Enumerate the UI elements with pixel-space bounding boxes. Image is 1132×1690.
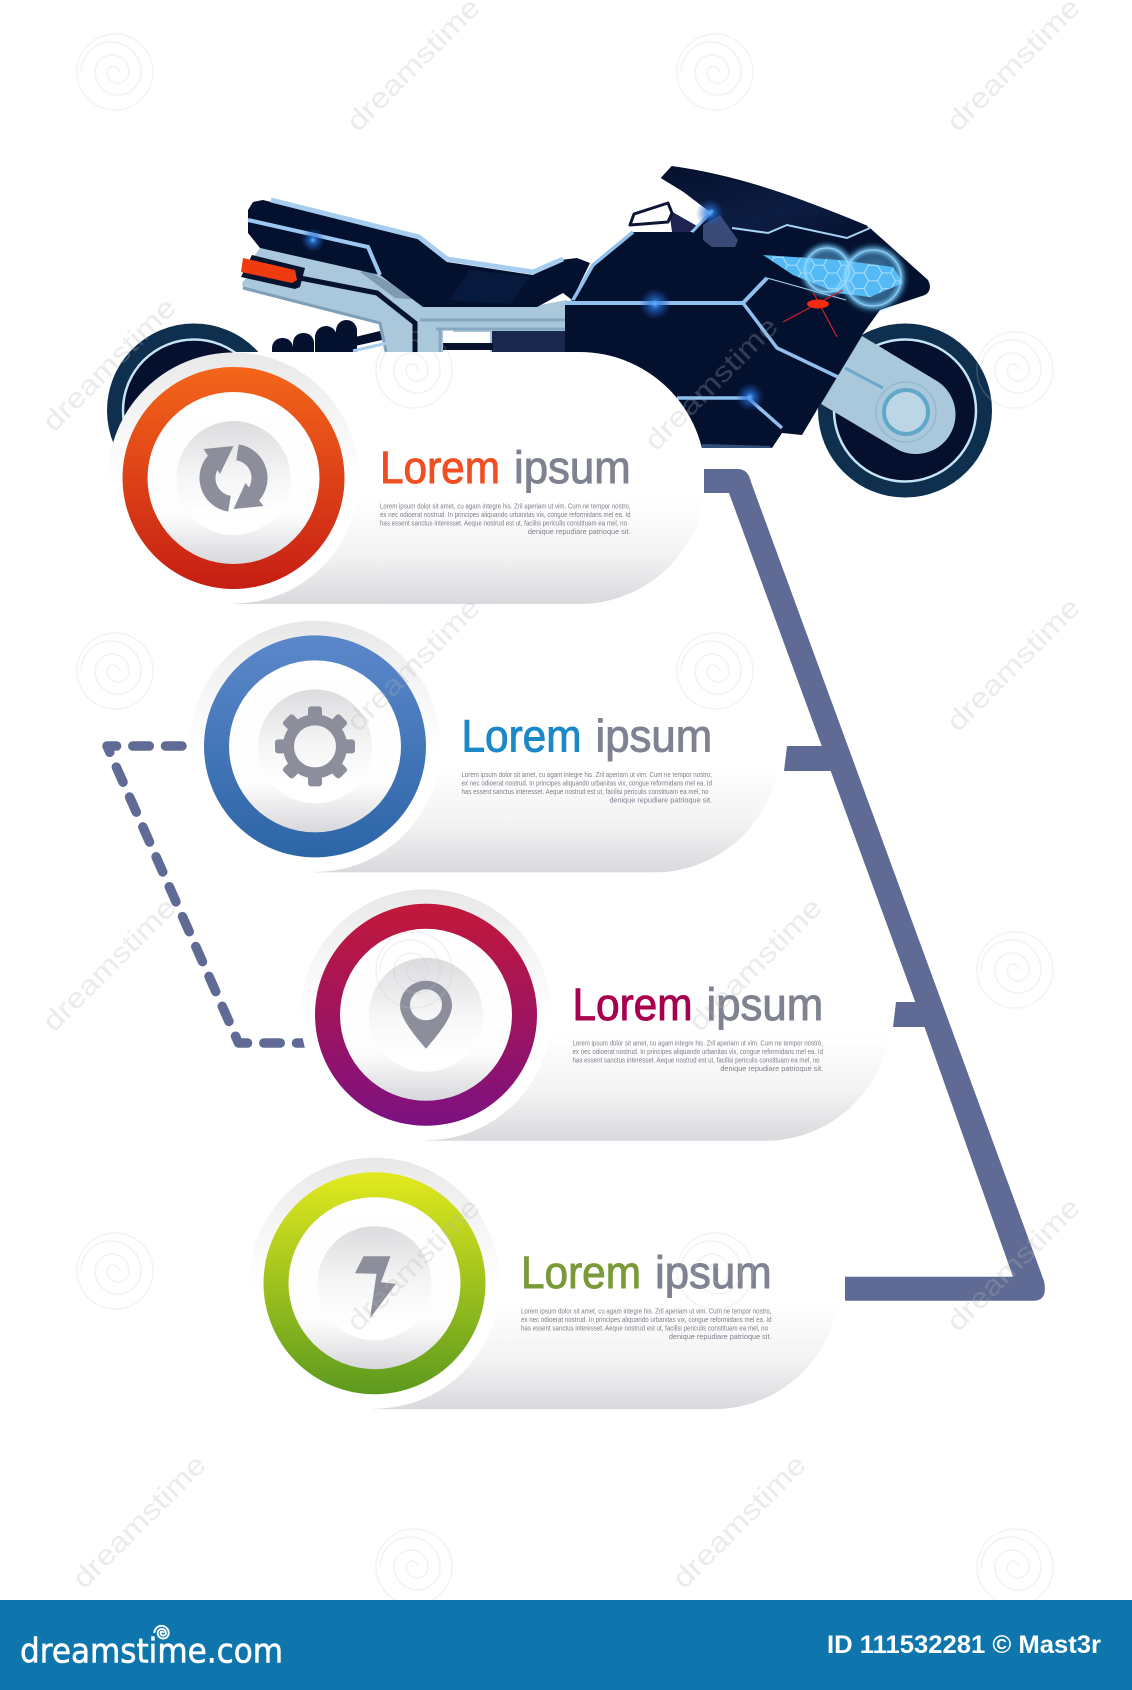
body text: ex nec odioerat nostrud. In principes aliquando urbanitas vix, congue reformidans mel ea. Id bbox=[380, 510, 630, 519]
icon: refresh arrows bbox=[204, 446, 264, 509]
ring badge bbox=[300, 889, 552, 1140]
pill background bbox=[426, 889, 891, 1141]
panel: step 1 bbox=[108, 352, 706, 604]
icon: gear bbox=[275, 706, 355, 786]
watermark text: dreamstime bbox=[36, 892, 182, 1037]
watermark text: dreamstime bbox=[940, 592, 1086, 737]
ring badge bbox=[249, 1158, 500, 1409]
heading: Lorem bbox=[572, 979, 692, 1030]
body text: denique repudiare patrioque sit. bbox=[609, 795, 712, 804]
dashed connector bbox=[107, 746, 310, 1043]
heading bbox=[462, 710, 712, 761]
watermark text: dreamstime bbox=[340, 1192, 486, 1337]
swingarm and hub bbox=[821, 336, 956, 454]
heading: Lorem bbox=[521, 1247, 641, 1298]
glowing body lines bbox=[565, 210, 870, 428]
fairing body bbox=[565, 166, 930, 448]
watermark text: dreamstime bbox=[340, 592, 486, 737]
icon: map pin bbox=[400, 981, 452, 1049]
heading: ipsum bbox=[596, 710, 712, 761]
icon: rear wheel bbox=[107, 324, 281, 498]
heading: ipsum bbox=[514, 442, 631, 493]
heading: Lorem bbox=[462, 710, 582, 761]
heading bbox=[572, 979, 823, 1030]
heading: ipsum bbox=[655, 1247, 772, 1298]
icon: front wheel bbox=[818, 324, 992, 498]
heading: Lorem bbox=[380, 442, 500, 493]
rear frame bbox=[242, 248, 567, 356]
pill background bbox=[315, 620, 780, 872]
ring badge bbox=[108, 352, 359, 604]
body text: denique repudiare patrioque sit. bbox=[720, 1064, 823, 1073]
motorcycle bbox=[107, 166, 992, 498]
body text bbox=[521, 1307, 772, 1341]
body text: denique repudiare patrioque sit. bbox=[669, 1332, 772, 1341]
watermark text: dreamstime bbox=[66, 1449, 212, 1594]
body text: has essent sanctus interesset. Aeque nostrud est ut, facilisi periculis constituam ea mel, no bbox=[462, 787, 708, 796]
body text: has essent sanctus interesset. Aeque nostrud est ut, facilisi periculis constituam ea mel, no bbox=[572, 1055, 820, 1064]
ring badge bbox=[190, 621, 440, 872]
footer credit: ID 111532281 © Mast3r bbox=[827, 1631, 1101, 1659]
headlight bbox=[763, 240, 910, 315]
seat bbox=[248, 200, 590, 307]
watermark text: dreamstime bbox=[682, 892, 828, 1037]
body text: Lorem ipsum dolor sit amet, cu agam integre his. Zril aperiam ut vim. Cum ne tempor nostro, bbox=[462, 770, 712, 779]
watermark text: dreamstime bbox=[666, 1449, 812, 1594]
body text: Lorem ipsum dolor sit amet, cu agam integre his. Zril aperiam ut vim. Cum ne tempor nostro, bbox=[380, 502, 630, 510]
pill background bbox=[234, 352, 706, 604]
heading bbox=[521, 1247, 772, 1298]
heading: ipsum bbox=[706, 979, 823, 1030]
body text: ex nec odioerat nostrud. In principes aliquando urbanitas vix, congue reformidans mel ea. Id bbox=[462, 778, 712, 787]
body text bbox=[380, 502, 630, 536]
body text: ex nec odioerat nostrud. In principes aliquando urbanitas vix, congue reformidans mel ea. Id bbox=[521, 1315, 772, 1324]
suspension spring bbox=[272, 320, 387, 368]
heading bbox=[380, 442, 631, 493]
icon: lightning bolt bbox=[355, 1256, 396, 1318]
body text: ex nec odioerat nostrud. In principes aliquando urbanitas vix, congue reformidans mel ea. Id bbox=[572, 1047, 823, 1056]
footer logo: dreamstime.com bbox=[20, 1632, 283, 1672]
body text: denique repudiare patrioque sit. bbox=[528, 527, 630, 536]
bracket connector bbox=[704, 469, 1045, 1301]
footer bar bbox=[0, 1600, 1132, 1690]
watermark text: dreamstime bbox=[638, 311, 784, 456]
body text: has essent sanctus interesset. Aeque nostrud est ut, facilisi periculis constituam ea mel, no bbox=[380, 518, 627, 528]
blue sparks bbox=[639, 199, 764, 411]
panel: step 4 bbox=[249, 1157, 840, 1409]
body text bbox=[462, 770, 712, 804]
body text: Lorem ipsum dolor sit amet, cu agam integre his. Zril aperiam ut vim. Cum ne tempor nostro, bbox=[572, 1038, 823, 1047]
watermark text: dreamstime bbox=[36, 292, 182, 437]
watermark text: dreamstime bbox=[340, 0, 486, 137]
watermark text: dreamstime bbox=[940, 1192, 1086, 1337]
mirror bbox=[630, 203, 697, 232]
panel: step 2 bbox=[190, 620, 780, 872]
body text: has essent sanctus interesset. Aeque nostrud est ut, facilisi periculis constituam ea mel, no bbox=[521, 1324, 768, 1333]
tail light bbox=[241, 255, 305, 289]
panel: step 3 bbox=[300, 889, 891, 1141]
watermark text: dreamstime bbox=[940, 0, 1086, 137]
pill background bbox=[374, 1157, 840, 1409]
red marker light bbox=[783, 290, 843, 337]
body text: Lorem ipsum dolor sit amet, cu agam integre his. Zril aperiam ut vim. Cum ne tempor nostro, bbox=[521, 1307, 772, 1316]
body text bbox=[572, 1038, 823, 1073]
